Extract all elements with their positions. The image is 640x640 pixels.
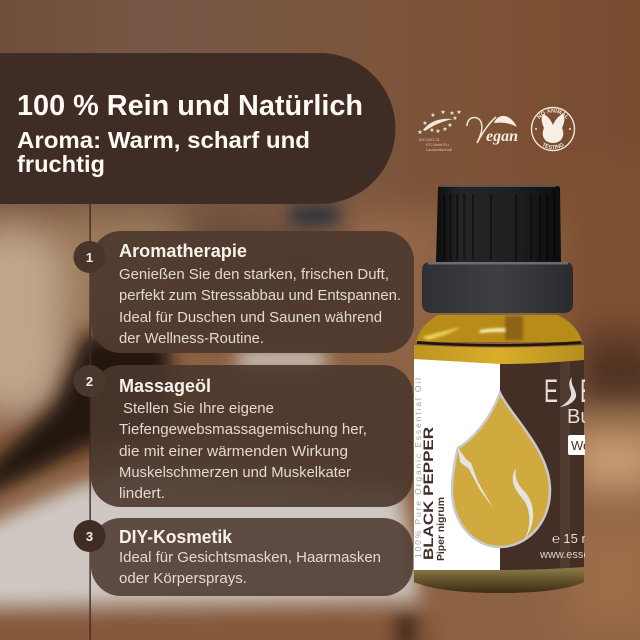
header panel: [0, 53, 396, 204]
panel: Aromatherapie: [91, 231, 414, 353]
icon: EU organic leaf: BIO-BIO-21: [419, 137, 441, 142]
label: white side: [414, 359, 500, 570]
timeline line: [89, 204, 91, 640]
body text: [119, 550, 381, 587]
bottle collar: [422, 262, 573, 313]
icon: EU organic leaf: ★: [442, 126, 448, 133]
body text: Ideal für Duschen und Saunen während: [119, 310, 382, 326]
step badge 3: 3: [86, 529, 93, 544]
glass shoulder: [416, 315, 582, 342]
icon: EU organic leaf: [417, 109, 462, 152]
icon: EU organic leaf: Landwirtschaft: [426, 147, 453, 152]
body text: der Wellness-Routine.: [119, 331, 264, 347]
icon: EU organic leaf: ★: [429, 127, 435, 134]
body text: die mit einer wärmenden Wirkung: [119, 444, 348, 460]
heading: Massageöl: [119, 376, 211, 396]
oil level line: [417, 341, 581, 346]
label vertical text: [413, 378, 447, 561]
icon: no animal testing: [530, 106, 576, 152]
label brand text: Bu: [567, 406, 591, 428]
bottle base: [414, 568, 584, 593]
body text: Stellen Sie Ihre eigene: [123, 401, 274, 417]
label brand text: We: [571, 438, 590, 453]
label brand text: ℮ 15 ml: [552, 531, 595, 546]
subtitle: Aroma: Warm, scharf und: [17, 127, 310, 153]
essential oil bottle: [414, 185, 585, 593]
icon: EU organic leaf: ★: [449, 110, 455, 117]
icon: vegan: [467, 116, 518, 145]
title: 100 % Rein und Natürlich: [17, 90, 363, 122]
icon: EU organic leaf: ★: [456, 109, 462, 116]
icon: no animal testing: TESTING: [542, 142, 564, 149]
icon: EU organic leaf: ★: [440, 109, 446, 116]
body text: Muskelschmerzen und Muskelkater: [119, 465, 351, 481]
heading: Aromatherapie: [119, 241, 247, 261]
label vertical text: 100% Pure Organic Essential Oil: [413, 378, 423, 558]
icon: vegan: egan: [486, 128, 518, 145]
body text: Ideal für Gesichtsmasken, Haarmasken: [119, 550, 381, 566]
icon: EU organic leaf: ★: [447, 122, 453, 129]
label vertical text: BLACK PEPPER: [420, 427, 436, 560]
heading: DIY-Kosmetik: [119, 527, 233, 547]
icon: EU organic leaf: ★: [417, 129, 423, 136]
body text: lindert.: [119, 486, 165, 502]
bottle cap: [436, 185, 561, 262]
icon: oil drop: [452, 393, 550, 547]
subtitle: fruchtig: [17, 151, 105, 177]
icon: EU organic leaf: ★: [422, 120, 428, 127]
icon: EU organic leaf: ★: [435, 128, 441, 135]
label brand text: www.essenbu: [539, 549, 608, 561]
label brand text: E: [580, 373, 594, 409]
certification badges: [417, 106, 576, 152]
label brand text: [540, 377, 585, 558]
icon: no animal testing: NO ANIMAL: [537, 108, 568, 120]
body text: Genießen Sie den starken, frischen Duft,: [119, 267, 389, 283]
glass body: [414, 345, 584, 364]
body text: perfekt zum Stressabbau und Entspannen.: [119, 288, 401, 304]
step badge 2: [74, 365, 106, 397]
body text: oder Körpersprays.: [119, 571, 247, 587]
body text: [119, 401, 367, 502]
label vertical text: Piper nigrum: [436, 497, 447, 561]
step badge 2: 2: [86, 374, 93, 389]
body text: Tiefengewebsmassagemischung her,: [119, 422, 367, 438]
icon: EU organic leaf: ★: [452, 115, 458, 122]
label brand text: E: [544, 373, 558, 409]
panel: Massageöl: [91, 365, 413, 507]
subtitle: [17, 127, 310, 177]
body text: [119, 267, 401, 347]
step badge 1: 1: [86, 250, 93, 265]
label: brown side: [500, 360, 584, 570]
icon: EU organic leaf: EG-Nicht-EU: [426, 142, 449, 147]
panel: DIY-Kosmetik: [91, 518, 413, 596]
icon: EU organic leaf: ★: [430, 112, 436, 119]
step badge 3: [74, 520, 106, 552]
step badge 1: [74, 241, 106, 273]
